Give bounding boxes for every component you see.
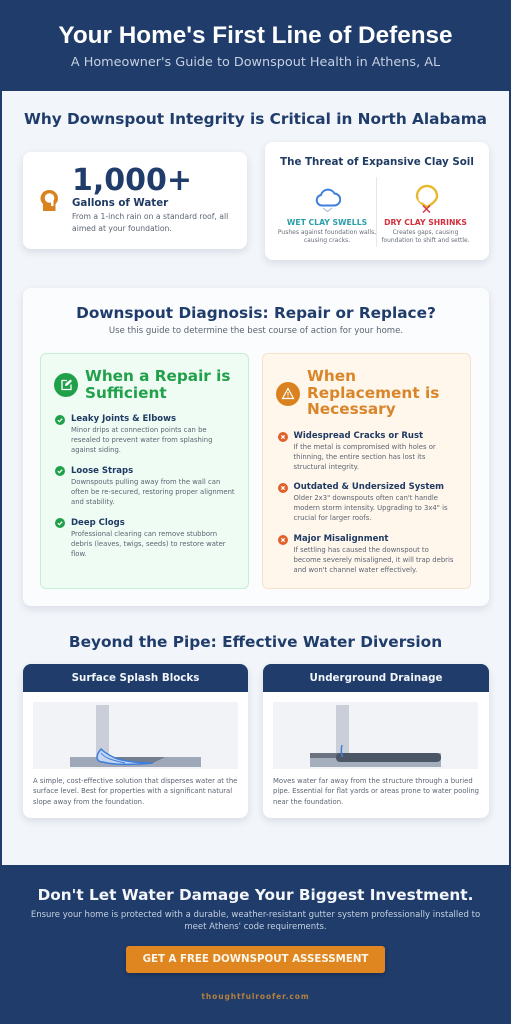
icon: dry cracked ring — [416, 184, 438, 213]
replacement heading: Necessary — [307, 400, 396, 418]
splash text: surface level. Best for properties with a significant natural — [33, 787, 232, 795]
repair item 3 — [55, 518, 226, 558]
replacement heading: When — [307, 367, 356, 385]
icon: repair edit — [54, 373, 78, 397]
panel: repair: resealed to prevent water from splashing — [71, 436, 212, 444]
section heading: why integrity: Why Downspout Integrity is Critical in North Alabama — [24, 110, 487, 128]
repair item 1 — [55, 414, 212, 454]
icon: warning — [276, 382, 300, 406]
icon: water drop — [40, 190, 58, 211]
underground header: Underground Drainage — [310, 672, 442, 684]
panel: repair: Deep Clogs — [71, 518, 125, 528]
stat description — [72, 212, 228, 233]
title: Your Home's First Line of Defense — [58, 22, 453, 49]
panel: repair: Minor drips at connection points can be — [71, 426, 207, 434]
icon: x — [278, 432, 288, 442]
footer call to action — [0, 866, 511, 1024]
wet clay text — [278, 228, 376, 244]
panel: repair: against siding. — [71, 446, 121, 454]
underground text: near the foundation. — [273, 798, 343, 806]
wet clay text: causing cracks. — [304, 237, 350, 244]
replacement item 2 — [278, 482, 448, 522]
diagram: underground pipe — [273, 702, 478, 769]
splash header — [23, 664, 248, 692]
icon: x — [278, 535, 288, 545]
clay heading: The Threat of Expansive Clay Soil — [280, 156, 474, 168]
splash text: slope away from the foundation. — [33, 798, 144, 806]
stat description: From a 1-inch rain on a standard roof, all — [72, 212, 228, 221]
panel: repair: often be re-secured, restoring proper alignment — [71, 488, 235, 496]
icon: check — [55, 466, 65, 476]
icon: x — [278, 483, 288, 493]
panel: replacement — [262, 353, 471, 589]
divider — [376, 177, 377, 247]
splash text: A simple, cost-effective solution that disperses water at the — [33, 777, 237, 785]
panel: replacement: thinning, the entire section has lost its — [294, 453, 425, 461]
splash header: Surface Splash Blocks — [72, 672, 199, 684]
section heading: diversion: Beyond the Pipe: Effective Water Diversion — [69, 633, 442, 651]
panel: replacement: crucial for larger roofs. — [294, 514, 371, 522]
panel: replacement: and won't channel water effectively. — [294, 566, 417, 574]
repair heading — [85, 367, 230, 402]
panel: repair: Downspouts pulling away from the wall can — [71, 478, 220, 486]
underground text: Moves water far away from the structure through a buried — [273, 777, 473, 785]
underground header — [263, 664, 489, 692]
replacement heading — [307, 367, 439, 418]
diagnosis heading: Downspout Diagnosis: Repair or Replace? — [76, 304, 436, 322]
panel: replacement: Widespread Cracks or Rust — [294, 431, 423, 441]
panel: expansive clay soil — [265, 142, 489, 260]
wet clay text: Pushes against foundation walls, — [278, 228, 376, 236]
main content panel — [2, 91, 509, 865]
underground text: pipe. Essential for flat yards or areas prone to water pooling — [273, 787, 479, 795]
subtitle: A Homeowner's Guide to Downspout Health in Athens, AL — [71, 55, 440, 70]
dry clay text: foundation to shift and settle. — [381, 237, 470, 244]
call to action button — [126, 946, 385, 973]
panel: replacement: modern storm intensity. Upgrading to 3x4" is — [294, 504, 448, 512]
repair heading: Sufficient — [85, 384, 167, 402]
panel: replacement: If the metal is compromised with holes or — [294, 442, 436, 450]
diagnosis subtitle: Use this guide to determine the best course of action for your home. — [109, 326, 403, 336]
panel: replacement: structural integrity. — [294, 463, 359, 471]
panel: repair — [40, 353, 249, 589]
stat label: Gallons of Water — [72, 197, 168, 209]
panel: repair: Leaky Joints & Elbows — [71, 414, 176, 424]
panel: repair: flow. — [71, 550, 87, 558]
icon: check — [55, 415, 65, 425]
header band — [0, 0, 511, 91]
panel: replacement: If settling has caused the downspout to — [294, 546, 429, 554]
panel: underground drainage — [263, 664, 489, 818]
repair item 2 — [55, 466, 235, 506]
repair heading: When a Repair is — [85, 367, 230, 385]
replacement item 1 — [278, 431, 436, 471]
website link: thoughtfulroofer.com — [201, 992, 310, 1000]
stat number: 1,000+ — [72, 163, 192, 198]
panel: replacement: become severely misaligned, it will trap debris — [294, 556, 453, 564]
dry clay label: DRY CLAY SHRINKS — [384, 218, 467, 227]
diagram: splash block — [33, 702, 238, 769]
footer text — [31, 910, 480, 932]
underground text — [273, 777, 479, 806]
panel: repair: debris (leaves, twigs, seeds) to restore water — [71, 540, 226, 548]
panel: repair: Loose Straps — [71, 466, 133, 476]
panel: replacement: Older 2x3" downspouts often can't handle — [294, 494, 438, 502]
panel: repair: Professional clearing can remove stubborn — [71, 530, 217, 538]
panel: replacement: Outdated & Undersized System — [294, 482, 444, 492]
dry clay text: Creates gaps, causing — [393, 228, 458, 236]
panel: splash blocks — [23, 664, 248, 818]
panel: repair: and stability. — [71, 498, 114, 506]
panel: 1,000+ gallons stat — [23, 152, 247, 249]
icon: check — [55, 518, 65, 528]
icon: cloud — [316, 188, 341, 212]
splash text — [33, 777, 237, 806]
stat description: aimed at your foundation. — [72, 224, 172, 233]
panel: diagnosis — [23, 288, 489, 606]
dry clay text — [381, 228, 470, 244]
call to action button: GET A FREE DOWNSPOUT ASSESSMENT — [143, 953, 368, 965]
panel: replacement: Major Misalignment — [294, 534, 388, 544]
replacement item 3 — [278, 534, 454, 574]
footer text: meet Athens' code requirements. — [184, 922, 327, 932]
footer heading: Don't Let Water Damage Your Biggest Investment. — [38, 886, 473, 904]
footer text: Ensure your home is protected with a durable, weather-resistant gutter system professionally installed to — [31, 910, 480, 920]
replacement heading: Replacement is — [307, 384, 439, 402]
wet clay label: WET CLAY SWELLS — [287, 218, 367, 227]
